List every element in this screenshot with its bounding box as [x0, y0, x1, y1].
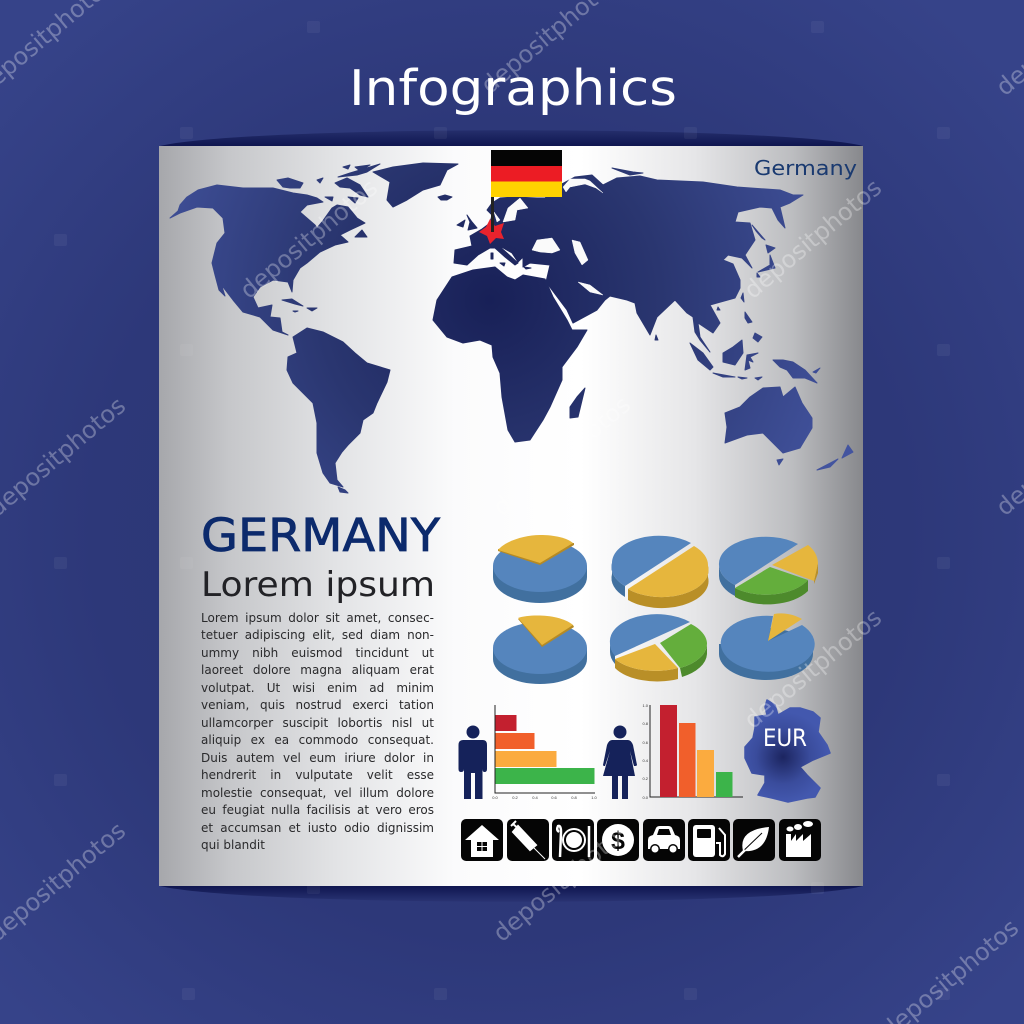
body text: volutpat. Ut wisi enim ad minim [201, 681, 434, 695]
icon: man [458, 726, 487, 799]
map: Africa [433, 267, 587, 442]
world map [170, 163, 853, 493]
bar chart: vertical: 1.0 [642, 703, 649, 708]
bar chart: vertical [642, 703, 743, 800]
body text: aliquip ex ea commodo consequat. [201, 733, 434, 747]
bar chart: horizontal: 1.0 [591, 795, 598, 800]
body text: laoreet dolore magna aliquam erat [201, 663, 434, 677]
body text: veniam, quis nostrud exerci tation [201, 698, 434, 712]
bar chart: vertical: 0.6 [642, 740, 649, 745]
map: Arctic islands [277, 164, 380, 237]
bar chart: vertical: 0.2 [642, 776, 649, 781]
bar chart: horizontal [492, 705, 598, 800]
body text: eu feugiat nulla facilisis at vero eros [201, 803, 434, 817]
map: Tierra del Fuego [338, 487, 348, 493]
bar chart: horizontal: 0.6 [551, 795, 558, 800]
map: Mediterranean islands [491, 253, 531, 269]
icon: syringe [507, 819, 549, 861]
body text: ummy nibh euismod tincidunt ut [201, 646, 434, 660]
icon: car [643, 819, 685, 861]
bar chart: horizontal: 0.0 [492, 795, 499, 800]
body text: tetuer adipiscing elit, sed diam non- [201, 628, 434, 642]
map: Asian and Pacific islands [612, 168, 820, 383]
red star [479, 219, 504, 244]
subheading: Lorem ipsum [201, 565, 435, 605]
flag pole [491, 150, 494, 232]
pie chart 4 [493, 616, 587, 684]
pie chart 1 [493, 535, 587, 603]
bar chart: horizontal: 0.8 [571, 795, 578, 800]
map: South America [287, 328, 390, 487]
icon: factory [779, 819, 821, 861]
icon: house [461, 819, 503, 861]
watermarks: depositphotos [739, 603, 887, 734]
icon row [461, 819, 821, 861]
body text: Duis autem vel eum iriure dolor in [201, 751, 434, 765]
pie chart 3 [719, 537, 818, 604]
pie chart 6 [719, 613, 815, 680]
icon: fuel pump [688, 819, 730, 861]
heading: GERMANY: GERMANY [201, 509, 441, 562]
map: inland seas [494, 179, 603, 295]
icon: dollar coin: $ [611, 827, 625, 855]
bar chart: vertical: 0.0 [642, 795, 649, 800]
icon: leaf [733, 819, 775, 861]
pie chart 2 [611, 536, 709, 608]
bar chart: vertical: 0.8 [642, 721, 649, 726]
bar chart: horizontal: 0.4 [532, 795, 539, 800]
body text: qui blandit [201, 838, 265, 852]
watermarks: depositphotos [488, 390, 636, 521]
body text: et accumsan et iusto odio dignissim [201, 821, 434, 835]
watermarks: depositphotos [488, 816, 636, 947]
map: Madagascar [570, 388, 585, 418]
body text: molestie consequat, vel illum dolore [201, 786, 434, 800]
icon: plate and cutlery [552, 819, 594, 861]
map: Iceland and Caribbean [282, 195, 452, 312]
body text: hendrerit in vulputate velit esse [201, 768, 434, 782]
body text: Lorem ipsum dolor sit amet, consec- [201, 611, 434, 625]
panel shadow: top [160, 130, 863, 146]
watermarks: depositphotos [235, 173, 383, 304]
map: Eurasia [454, 175, 803, 352]
map: North America [170, 185, 365, 335]
currency label: EUR [763, 724, 807, 752]
flag [491, 150, 562, 197]
country label: Germany [754, 156, 857, 180]
body text [201, 611, 434, 852]
bar chart: horizontal: 0.2 [512, 795, 519, 800]
icon: woman [603, 726, 637, 799]
icon: dollar coin [597, 819, 639, 861]
pie chart 5 [610, 614, 707, 681]
title: Infographics [349, 60, 677, 117]
panel: main sheet [159, 146, 863, 886]
body text: ullamcorper suscipit lobortis nisl ut [201, 716, 434, 730]
bar chart: vertical: 0.4 [642, 758, 649, 763]
panel shadow: bottom [160, 886, 863, 902]
watermarks: depositphotos [739, 173, 887, 304]
flag marker: Germany [479, 150, 562, 244]
map: Germany with currency [745, 700, 830, 802]
map: Greenland [373, 163, 458, 207]
map: UK and Ireland [457, 215, 477, 230]
map: Australia and New Zealand [725, 387, 853, 470]
